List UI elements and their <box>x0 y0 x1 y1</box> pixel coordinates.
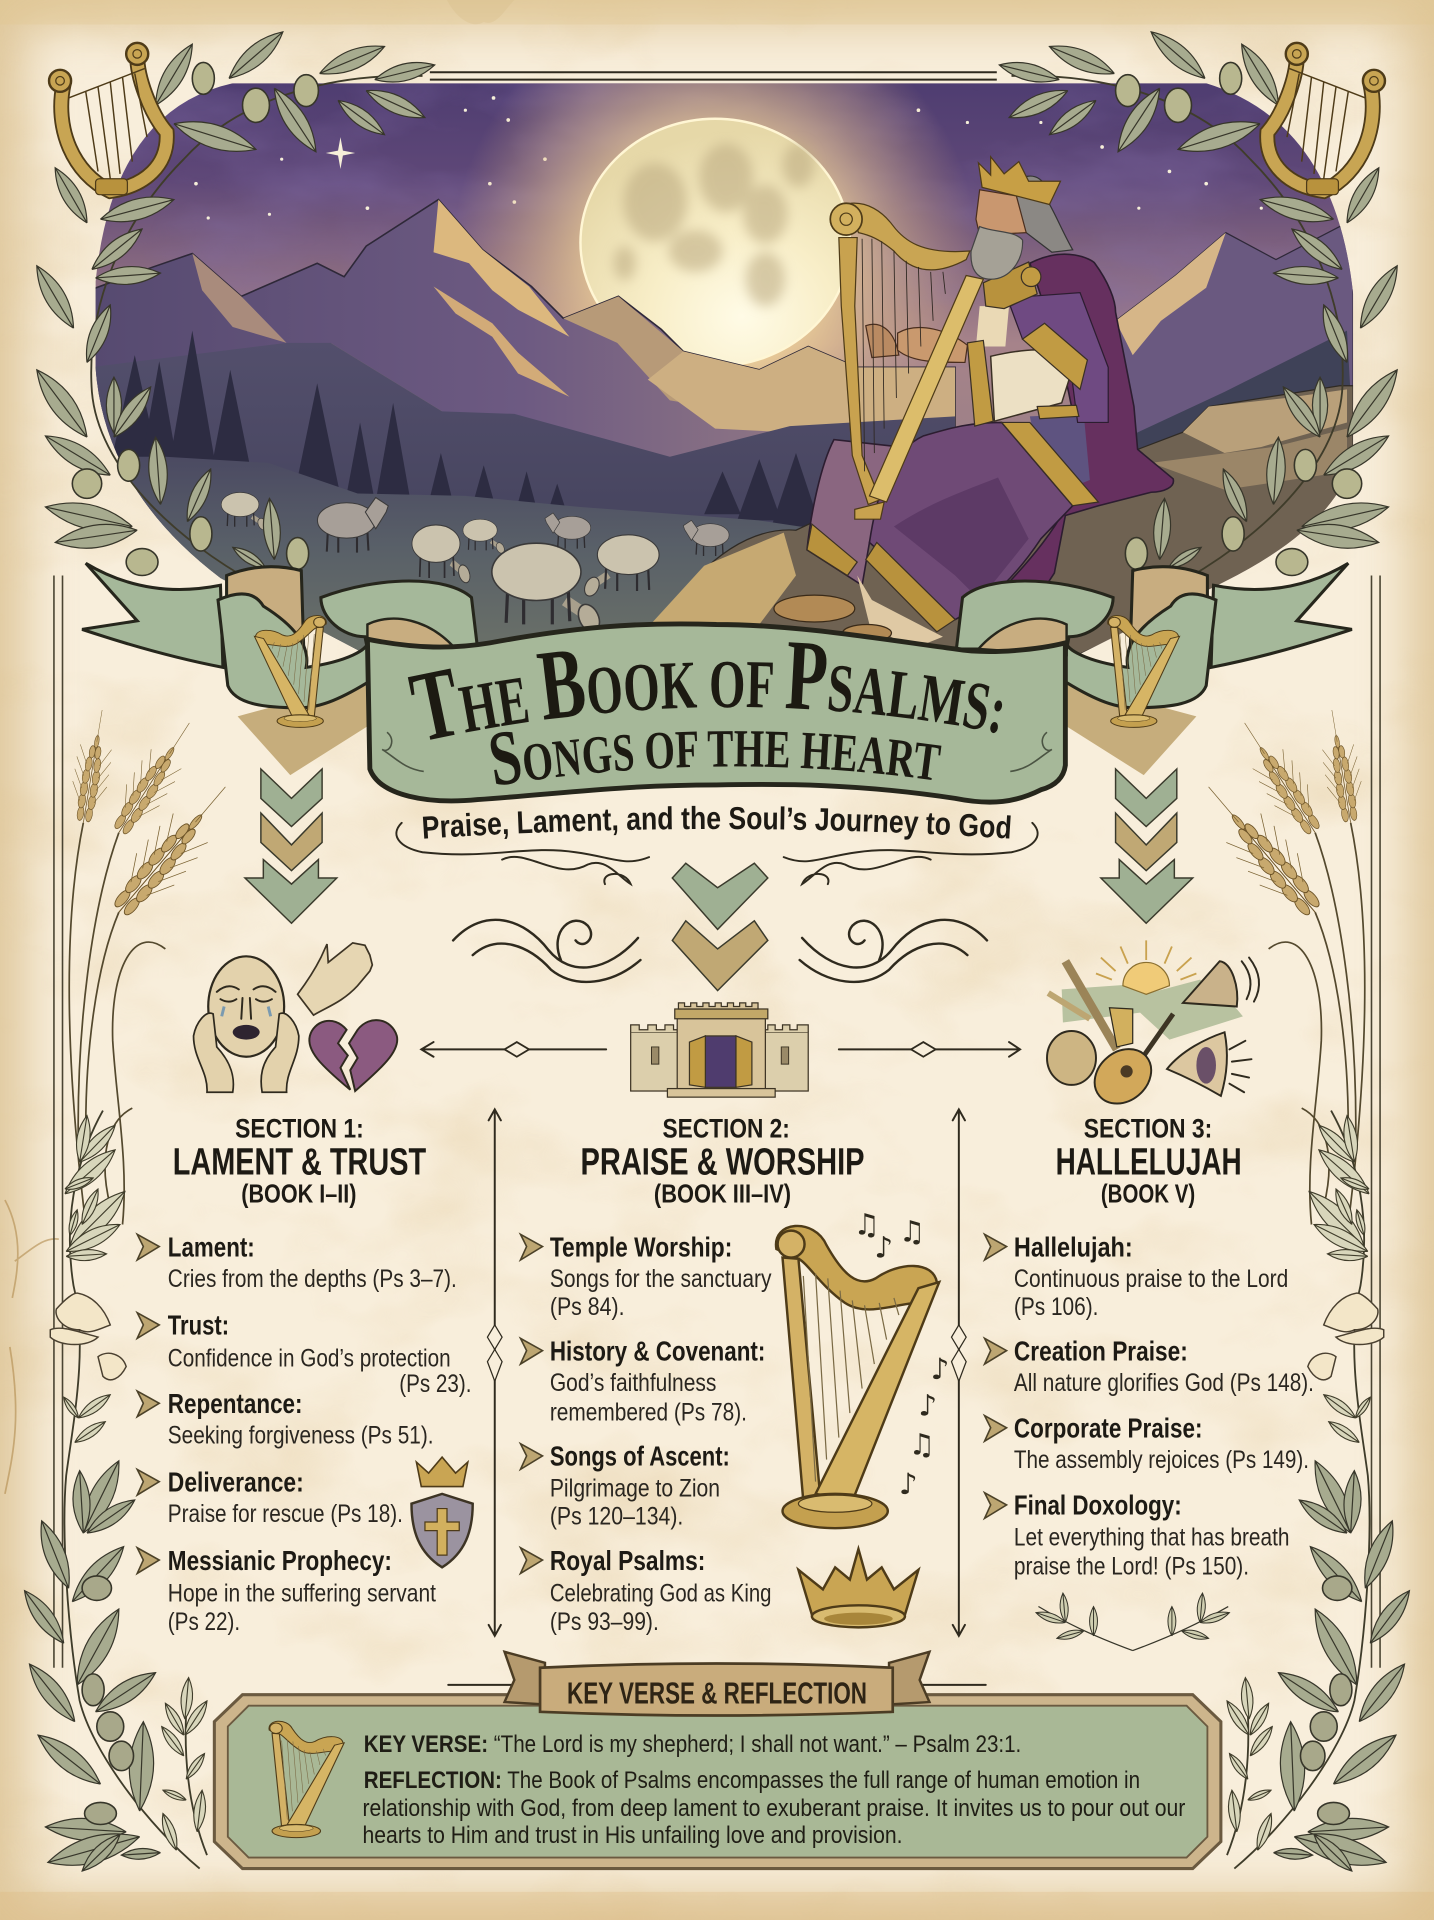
arrow left of temple <box>421 1042 606 1057</box>
item: Royal Psalms: Celebrating God as King <box>550 1580 771 1608</box>
icon: temple <box>631 1003 808 1097</box>
key verse banner <box>448 1652 986 1716</box>
hair <box>1010 176 1073 252</box>
item: Final Doxology: Let everything that has breath <box>1014 1523 1289 1551</box>
sash and hems <box>1002 422 1098 506</box>
item: History & Covenant: remembered (Ps 78). <box>550 1398 747 1426</box>
cape <box>980 254 1173 612</box>
mountains <box>89 200 1353 539</box>
column divider left <box>487 1109 502 1636</box>
grazing sheep <box>221 492 729 635</box>
section 3 header <box>1056 1114 1242 1208</box>
item: Final Doxology: praise the Lord! (Ps 150). <box>1014 1553 1249 1581</box>
title line 1 <box>420 707 1007 742</box>
rock outcrop <box>631 386 1353 655</box>
sleeve <box>991 350 1069 421</box>
title banner: SONGS OF THE HEART <box>490 731 942 785</box>
title line 2 <box>494 766 940 786</box>
item: Trust: Confidence in God’s protection <box>168 1345 451 1373</box>
item: Messianic Prophecy: (Ps 22). <box>168 1608 240 1636</box>
section 1 header <box>173 1114 426 1208</box>
icon: gold crown <box>798 1549 918 1627</box>
ribbon, right <box>956 563 1352 775</box>
item: Creation Praise: Creation Praise: <box>1014 1335 1188 1366</box>
item: Trust <box>137 1310 471 1398</box>
item: Temple Worship: Songs for the sanctuary <box>550 1265 772 1293</box>
subtitle with flourish <box>396 800 1038 884</box>
moon with glow <box>468 84 963 369</box>
item: Repentance: Seeking forgiveness (Ps 51). <box>168 1422 434 1450</box>
item: Deliverance: Deliverance: <box>168 1466 304 1497</box>
harp on left ribbon <box>254 616 326 727</box>
item: Temple Worship <box>520 1231 772 1321</box>
item: Creation Praise: All nature glorifies God (Ps 148). <box>1014 1369 1314 1397</box>
column 3 list <box>985 1231 1314 1581</box>
item: Final Doxology: Final Doxology: <box>1014 1490 1182 1521</box>
tunic <box>976 306 1009 347</box>
corner lyres and olive wreath, right <box>997 25 1406 588</box>
reflection text <box>363 1767 1185 1849</box>
title banner: THE BOOK OF PSALMS: <box>408 642 1002 740</box>
item: Royal Psalms <box>520 1545 771 1636</box>
item: Hallelujah: Hallelujah: <box>1014 1231 1133 1262</box>
section 3 header: HALLELUJAH <box>1056 1141 1242 1183</box>
item: Creation Praise <box>985 1335 1314 1397</box>
icon: crown and shield <box>411 1457 473 1567</box>
top rule <box>430 72 997 80</box>
front robe <box>869 422 1073 620</box>
King David with harp <box>774 157 1173 649</box>
lower margin botanicals, right <box>1190 576 1417 1876</box>
item: Songs of Ascent <box>520 1441 730 1530</box>
column divider right <box>951 1109 966 1636</box>
item: Messianic Prophecy: Messianic Prophecy: <box>168 1545 392 1576</box>
reflection text: REFLECTION: The Book of Psalms encompasses the full range of human emotion in <box>364 1767 1140 1794</box>
icon: instruments, sunrise and singing mouth <box>1047 940 1259 1115</box>
item: Trust: (Ps 23). <box>399 1370 471 1398</box>
chevron arrows, left <box>245 769 337 923</box>
column 1 list <box>137 1231 471 1636</box>
harp on right ribbon <box>1108 616 1180 727</box>
panel: key verse and reflection <box>214 1695 1221 1869</box>
section 3 header: SECTION 3: <box>1084 1114 1212 1144</box>
ribbon, left <box>82 563 478 775</box>
chevron arrows, right <box>1101 769 1193 923</box>
subtitle with flourish: Praise, Lament, and the Soul’s Journey to God <box>422 806 1011 840</box>
item: History & Covenant: History & Covenant: <box>550 1335 765 1366</box>
corner lyres and olive wreath, left <box>28 25 437 588</box>
item: Lament: Cries from the depths (Ps 3–7). <box>168 1265 457 1293</box>
icon: small harp <box>269 1721 344 1838</box>
icon: large golden harp with notes: ♪ <box>931 1352 949 1386</box>
item: Corporate Praise: Corporate Praise: <box>1014 1413 1203 1444</box>
item: Final Doxology <box>985 1490 1289 1581</box>
icon: laurel sprig <box>1035 1593 1231 1651</box>
item: Royal Psalms: Royal Psalms: <box>550 1545 705 1576</box>
lower margin botanicals, left <box>17 576 244 1876</box>
item: Songs of Ascent: Pilgrimage to Zion <box>550 1474 720 1502</box>
night sky <box>74 73 1371 661</box>
face <box>976 190 1026 235</box>
crown <box>978 157 1060 204</box>
section 3 header: (BOOK V) <box>1101 1180 1195 1208</box>
item: Messianic Prophecy <box>137 1545 436 1636</box>
key verse banner: KEY VERSE & REFLECTION <box>567 1676 867 1710</box>
foothills and forest <box>89 331 955 661</box>
section 2 header: PRAISE & WORSHIP <box>580 1141 865 1183</box>
item: Hallelujah: (Ps 106). <box>1014 1293 1098 1321</box>
item: Lament: Lament: <box>168 1231 255 1262</box>
icon: large golden harp with notes: ♪ <box>874 1231 893 1265</box>
beard <box>971 227 1023 279</box>
item: Temple Worship: Temple Worship: <box>550 1231 732 1262</box>
item: History & Covenant: God’s faithfulness <box>550 1369 716 1397</box>
icon: large golden harp with notes: ♫ <box>899 1215 925 1249</box>
icon: weeping face, hands and broken heart <box>194 943 397 1092</box>
reflection text: relationship with God, from deep lament to exuberant praise. It invites us to pour out our <box>363 1795 1185 1822</box>
under belt tunic <box>1030 414 1090 490</box>
arrow right of temple <box>839 1042 1020 1057</box>
item: Temple Worship: (Ps 84). <box>550 1293 625 1321</box>
golden harp <box>830 203 983 519</box>
icon: large golden harp with notes: ♫ <box>909 1428 935 1462</box>
upper purple <box>1010 293 1108 422</box>
item: Repentance <box>137 1388 434 1450</box>
item: Royal Psalms: (Ps 93–99). <box>550 1608 659 1636</box>
icon: large golden harp with notes: ♫ <box>854 1207 880 1241</box>
reflection text: hearts to Him and trust in His unfailing love and provision. <box>363 1822 903 1849</box>
item: Deliverance: Praise for rescue (Ps 18). <box>168 1500 403 1528</box>
item: History & Covenant <box>520 1335 765 1426</box>
sandals <box>774 595 855 622</box>
section 1 header: SECTION 1: <box>235 1114 364 1144</box>
section 1 header: (BOOK I–II) <box>241 1180 356 1208</box>
item: Hallelujah <box>985 1231 1288 1321</box>
section 2 header: (BOOK III–IV) <box>654 1180 791 1208</box>
icon: large golden harp with notes: ♪ <box>899 1467 918 1501</box>
icon: large golden harp with notes <box>776 1207 949 1528</box>
item: Corporate Praise <box>985 1413 1309 1474</box>
back leg robe <box>807 440 900 585</box>
collar <box>983 262 1037 309</box>
item: Hallelujah: Continuous praise to the Lord <box>1014 1265 1288 1293</box>
key verse text: KEY VERSE: “The Lord is my shepherd; I shall not want.” – Psalm 23:1. <box>364 1731 1021 1758</box>
item: Corporate Praise: The assembly rejoices (Ps 149). <box>1014 1446 1309 1474</box>
column 2 list <box>520 1231 772 1636</box>
item: Songs of Ascent: (Ps 120–134). <box>550 1502 683 1530</box>
section 1 header: LAMENT & TRUST <box>173 1141 426 1183</box>
item: Lament <box>137 1231 457 1293</box>
section 2 header: SECTION 2: <box>663 1114 790 1144</box>
chevron arrows, centre <box>672 863 768 991</box>
flourish left <box>453 920 640 982</box>
item: Songs of Ascent: Songs of Ascent: <box>550 1441 730 1472</box>
title banner <box>365 622 1068 805</box>
item: Repentance: Repentance: <box>168 1388 303 1419</box>
hero scene: King David in the mountains at night <box>96 83 1354 654</box>
hands <box>866 324 899 358</box>
flourish right <box>800 920 987 982</box>
item: Deliverance <box>137 1466 403 1528</box>
item: Trust: Trust: <box>168 1310 229 1341</box>
section 2 header <box>580 1114 865 1208</box>
icon: large golden harp with notes: ♪ <box>918 1389 937 1423</box>
item: Messianic Prophecy: Hope in the suffering servant <box>168 1580 436 1608</box>
